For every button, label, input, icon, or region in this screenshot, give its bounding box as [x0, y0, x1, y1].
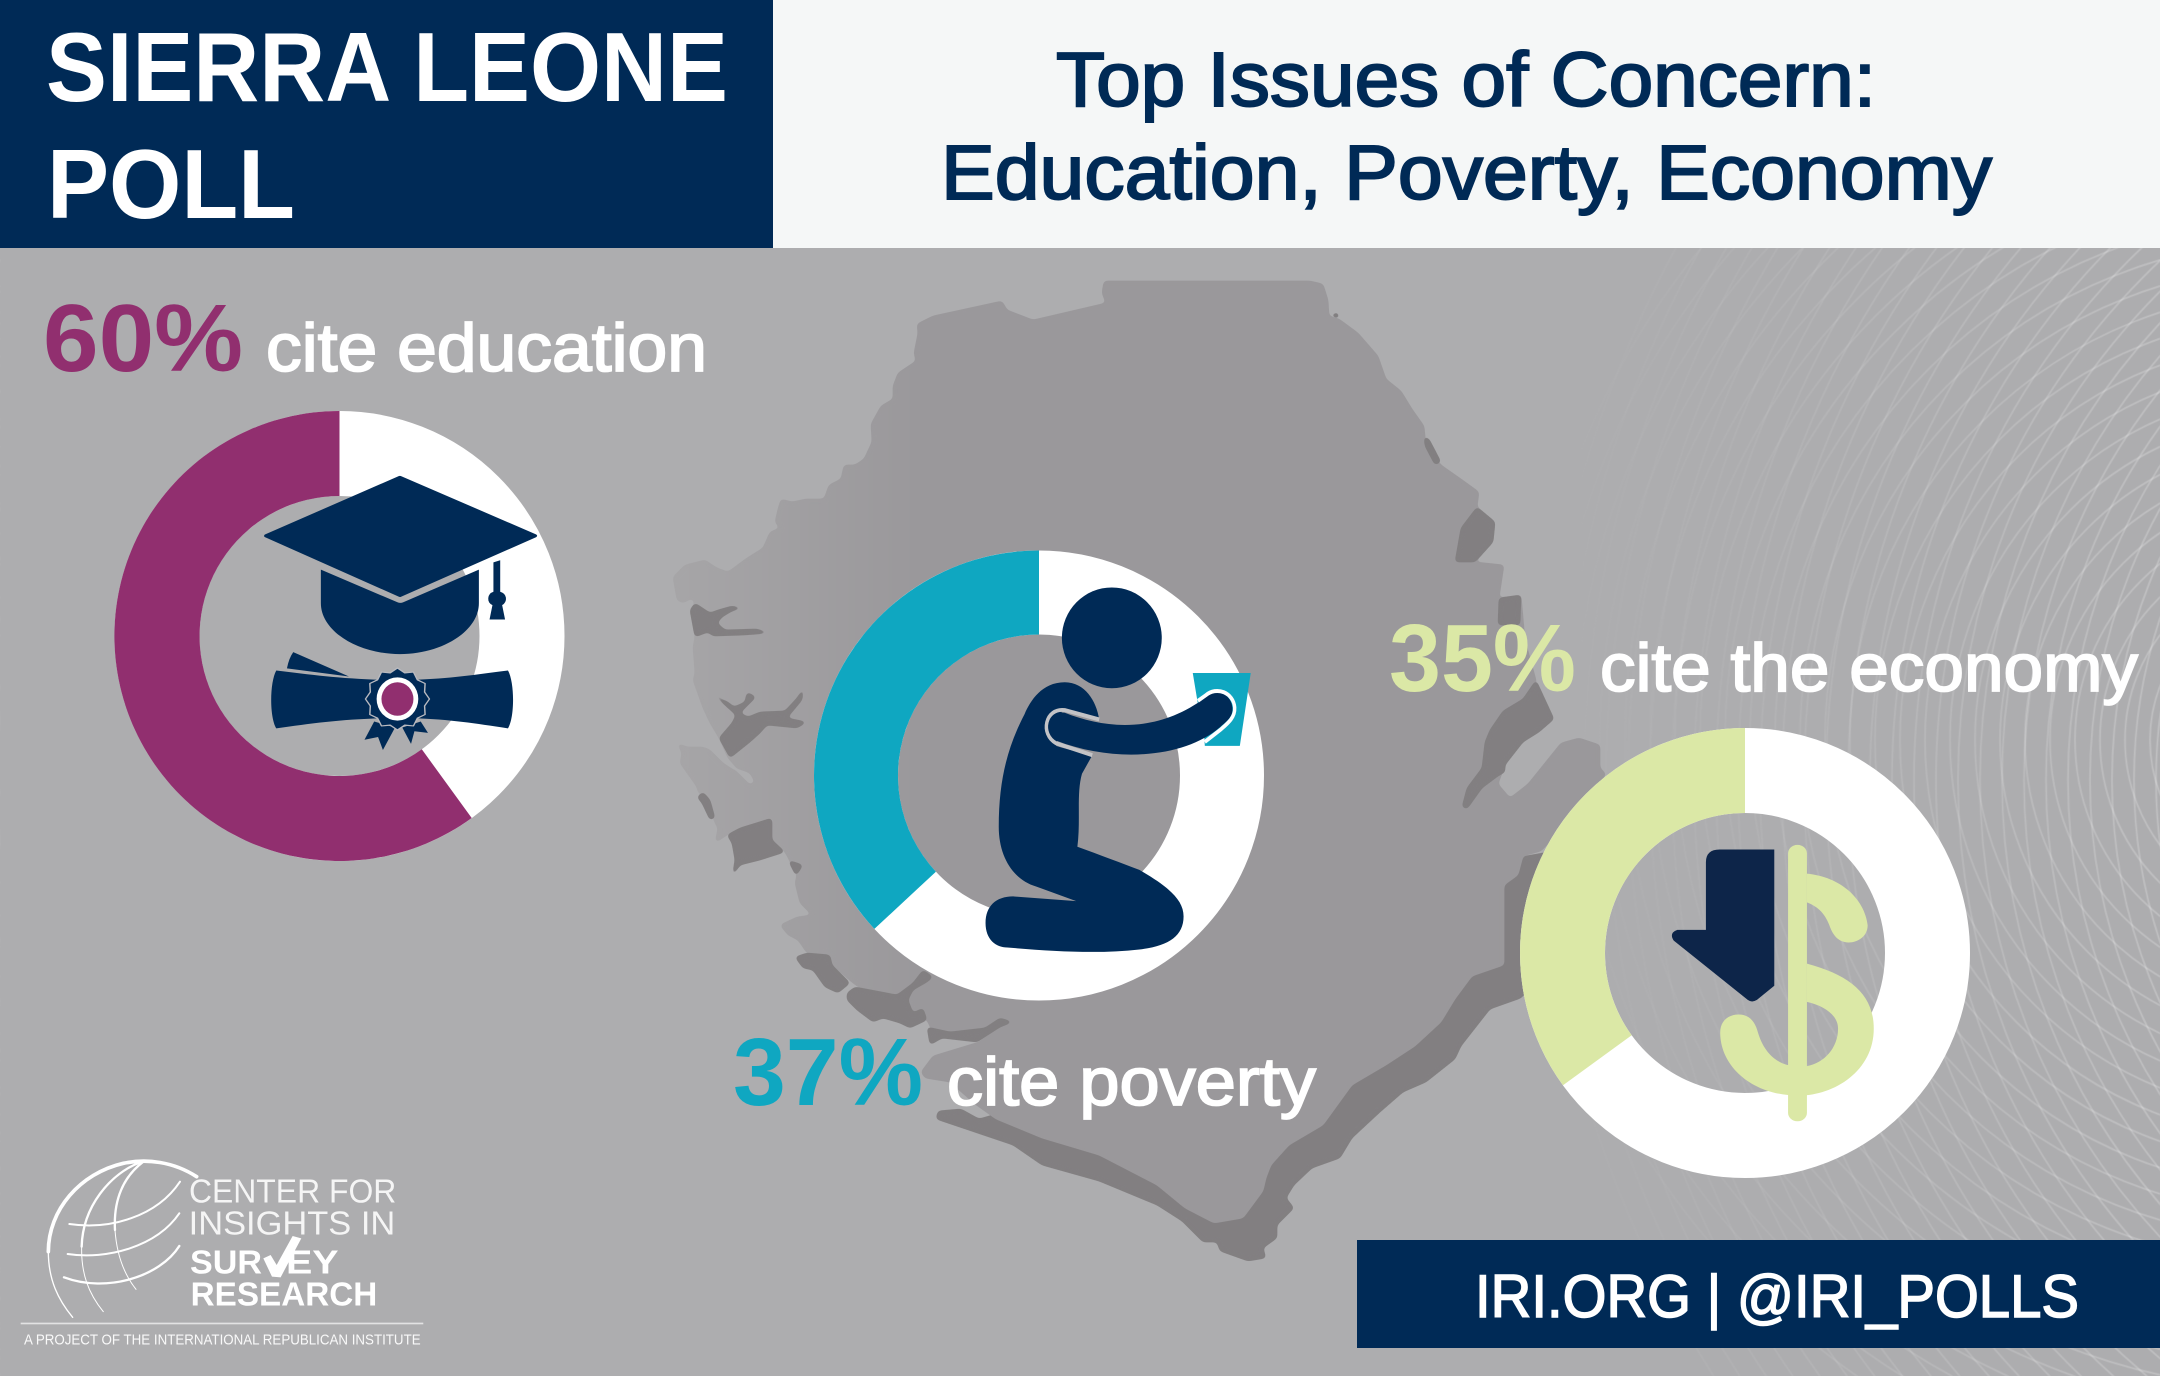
education donut chart [114, 411, 522, 861]
icon: kneeling person begging [986, 587, 1251, 952]
logo wordmark: RESEARCH [191, 1277, 377, 1314]
economy heading: cite the economy [1600, 630, 2138, 706]
icon: falling dollar [1672, 845, 1874, 1121]
logo wordmark: SUR [190, 1244, 262, 1281]
economy heading [1389, 605, 2138, 712]
logo wordmark: EY [286, 1244, 339, 1281]
poverty heading: cite poverty [947, 1044, 1316, 1120]
education heading [43, 285, 707, 392]
icon: graduation cap and diploma [266, 477, 535, 750]
footer banner: IRI.ORG | @IRI_POLLS [1475, 1263, 2079, 1330]
map shadow [936, 850, 1606, 1261]
title: POLL [47, 129, 295, 239]
logo wordmark [21, 1174, 423, 1348]
header left panel [0, 0, 773, 248]
subtitle [941, 37, 1993, 216]
map land [673, 281, 1606, 1223]
map dark inlets and islands [690, 312, 1554, 1045]
education heading: 60% [43, 285, 243, 392]
subtitle: Education, Poverty, Economy [941, 130, 1993, 216]
header right panel [773, 0, 2160, 248]
economy heading: 35% [1389, 605, 1576, 712]
poverty heading [733, 1019, 1316, 1126]
education heading: cite education [266, 310, 707, 386]
logo wordmark: CENTER FOR [189, 1174, 396, 1211]
footer banner [1357, 1240, 2160, 1348]
title [46, 12, 728, 239]
logo wordmark: A PROJECT OF THE INTERNATIONAL REPUBLICAN INSTITUTE [24, 1332, 421, 1348]
logo globe [48, 1161, 197, 1317]
map of Sierra Leone [673, 281, 1606, 1261]
poverty donut chart [814, 550, 1222, 958]
logo wordmark: INSIGHTS IN [189, 1205, 395, 1242]
subtitle: Top Issues of Concern: [1056, 37, 1876, 123]
poverty heading: 37% [733, 1019, 923, 1126]
economy donut chart [1520, 728, 1928, 1136]
title: SIERRA LEONE [46, 12, 728, 122]
logo: Center for Insights in Survey Research [21, 1161, 423, 1348]
